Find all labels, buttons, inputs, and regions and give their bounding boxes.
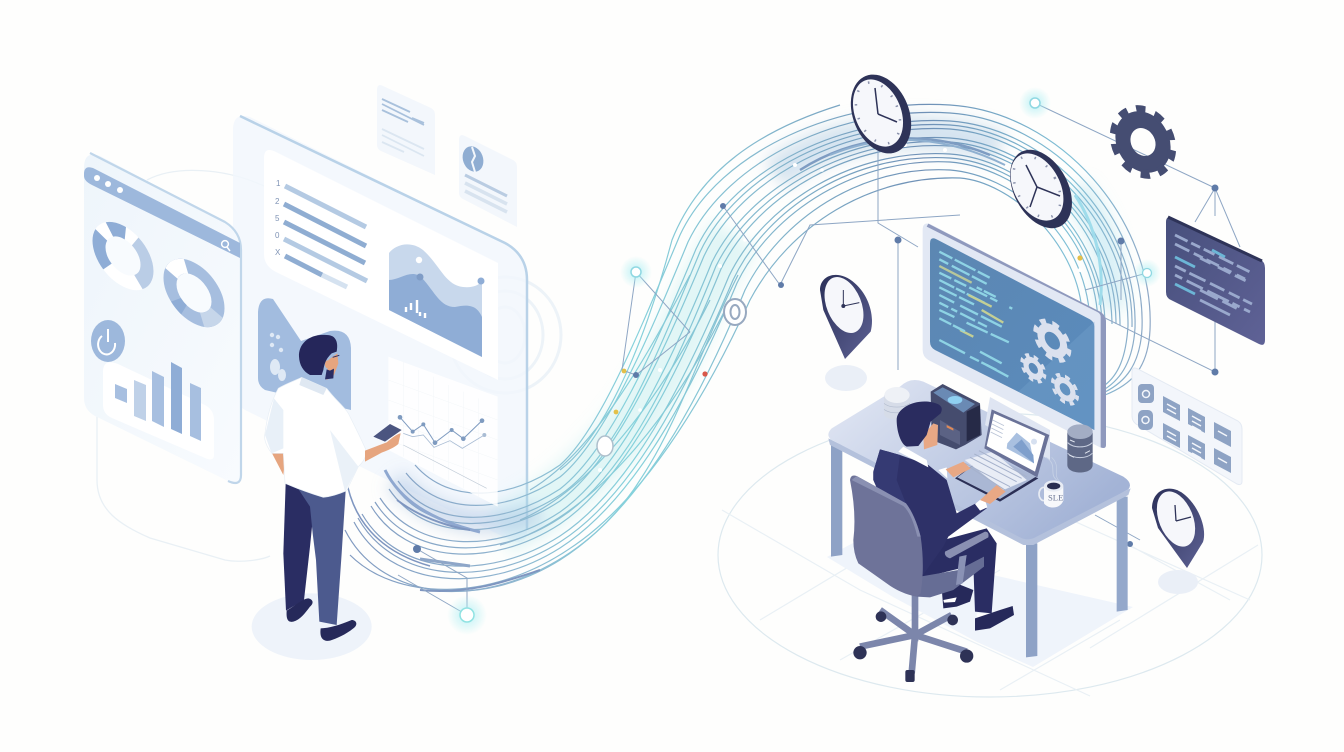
- chair base: [853, 593, 973, 682]
- person standing with phone: [252, 335, 402, 660]
- list card: 2: [275, 197, 280, 206]
- hand and phone: [365, 433, 401, 462]
- icon: gear top right: [1112, 103, 1174, 181]
- database cylinder: [1067, 424, 1093, 472]
- monitor: [923, 223, 1106, 448]
- panel: large analytics dashboard: [233, 116, 527, 542]
- office chair and seated person: [850, 401, 1014, 682]
- data flow ribbon of curved lines: [345, 104, 1150, 592]
- panel: browser window with donuts: [84, 153, 241, 483]
- shoe: [975, 606, 1014, 631]
- chair back and seat: [917, 557, 984, 597]
- floating document: text note: [377, 85, 435, 175]
- concentric rings behind dashboard: [449, 277, 561, 393]
- desk items: [884, 384, 1093, 508]
- list card: 0: [275, 231, 280, 240]
- list card: [264, 150, 498, 380]
- coffee mug: SLE: [1048, 493, 1063, 503]
- wall clock right: [997, 139, 1085, 239]
- seated trousers: [920, 528, 997, 617]
- monitor stand: [985, 397, 1050, 460]
- pin clock left: [817, 271, 872, 391]
- jacket: [873, 449, 987, 578]
- bright dots along strands: [598, 143, 1082, 472]
- floor circle and grid under desk: [718, 413, 1262, 697]
- panel: icon grid card: [1132, 368, 1242, 485]
- arm skin: [272, 452, 286, 475]
- desk top: [828, 380, 1131, 545]
- bar chart card: [103, 362, 214, 459]
- coffee mug: [1039, 457, 1063, 508]
- floor shadow: [252, 593, 372, 660]
- wall clock top: [840, 65, 922, 163]
- laptop: [955, 409, 1049, 502]
- list card: 1: [276, 179, 281, 188]
- floating document: pie note: [459, 135, 517, 227]
- icon: power button: [91, 320, 125, 362]
- desk floor shadow: [827, 543, 1133, 667]
- network lines and nodes: [398, 103, 1240, 615]
- inner dark swirl strokes: [345, 138, 1101, 591]
- glowing nodes: [447, 87, 1161, 635]
- gears on monitor: [1022, 315, 1077, 408]
- shirt: [265, 377, 367, 497]
- pen cup: [884, 387, 910, 420]
- head: [299, 335, 339, 380]
- network node dots: [413, 184, 1218, 553]
- list card: X: [275, 248, 281, 257]
- area chart: [389, 244, 484, 357]
- collar and hands: [898, 447, 928, 467]
- workstation: desk, monitor, laptop: [828, 223, 1131, 657]
- title bar: [84, 167, 240, 258]
- blue tile with dots: [258, 298, 351, 410]
- armrest: [945, 532, 989, 585]
- soft ribbon glow: [395, 133, 1111, 530]
- trousers: [283, 483, 346, 625]
- faint backdrop outline behind left panels: [97, 170, 270, 561]
- donut chart one: [99, 220, 147, 292]
- pin clock right: [1149, 486, 1204, 594]
- donut chart two: [170, 257, 218, 329]
- device stack: [931, 384, 982, 449]
- code lines on monitor: [939, 252, 1017, 377]
- head: [923, 423, 938, 449]
- desk legs: [831, 443, 1128, 657]
- shoes: [287, 598, 356, 641]
- panel: dark code window: [1166, 217, 1265, 345]
- line chart screen: [388, 357, 498, 507]
- list card: 5: [275, 214, 280, 223]
